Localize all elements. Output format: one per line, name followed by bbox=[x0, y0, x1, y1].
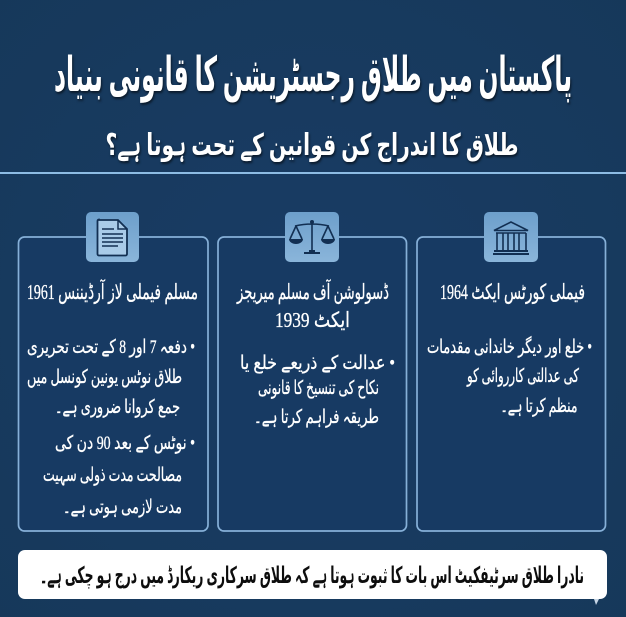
bullet text: card 1: • نوٹس کے بعد 90 دن کی bbox=[55, 433, 195, 454]
bullet text: card 1: جمع کروانا ضروری ہے۔ bbox=[55, 397, 180, 418]
bullet text: card 3: منظم کرتا ہے۔ bbox=[500, 396, 578, 417]
bullet text: card 2: طریقہ فراہم کرتا ہے۔ bbox=[254, 407, 379, 428]
heading: card 2: ڈسولوشن آف مسلم میریجز bbox=[236, 279, 389, 305]
icon: courthouse bbox=[484, 212, 538, 262]
bullet text: card 3 bbox=[427, 335, 592, 417]
bullet text: card 2: نکاح کی تنسیخ کا قانونی bbox=[258, 378, 379, 399]
callout: NADRA certificate note bbox=[18, 550, 607, 605]
bullet text: card 2 bbox=[240, 353, 395, 428]
bullet text: card 2: • عدالت کے ذریعے خلع یا bbox=[240, 353, 395, 374]
icon: document bbox=[86, 212, 139, 262]
heading: card 2 bbox=[236, 279, 389, 332]
heading: card 2: ایکٹ 1939 bbox=[275, 308, 350, 332]
panel: Dissolution of Muslim Marriages Act 1939 bbox=[218, 212, 406, 531]
bullet text: card 1: مدت لازمی ہوتی ہے۔ bbox=[63, 497, 182, 518]
bullet text: card 1: • دفعہ 7 اور 8 کے تحت تحریری bbox=[27, 337, 195, 358]
icon: scales of justice bbox=[285, 212, 339, 262]
bullet text: card 1: طلاق نوٹس یونین کونسل میں bbox=[27, 367, 182, 388]
panel: Muslim Family Laws Ordinance 1961 bbox=[18, 212, 208, 531]
heading: card 1: مسلم فیملی لاز آرڈیننس 1961 bbox=[27, 279, 198, 305]
bullet text: card 1 bbox=[27, 337, 195, 518]
bullet text: card 1: مصالحت مدت ذولی سہیت bbox=[43, 465, 182, 486]
panel: Family Courts Act 1964 bbox=[417, 212, 606, 531]
